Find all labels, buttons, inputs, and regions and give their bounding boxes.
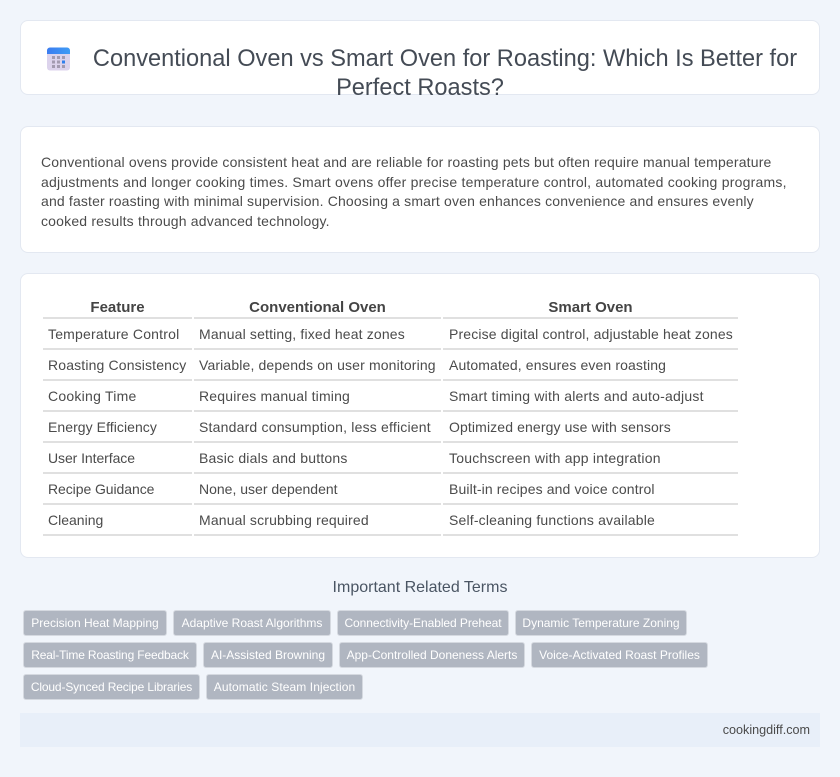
row: recipe guidance: Built-in recipes and voice control (449, 481, 655, 497)
row: recipe guidance: None, user dependent (199, 481, 338, 497)
tag (23, 610, 167, 636)
tag group: related terms (23, 610, 708, 700)
footer source text: cookingdiff.com (723, 723, 810, 737)
tag (206, 674, 363, 700)
row: user interface: User Interface (48, 450, 135, 466)
row: cleaning: Manual scrubbing required (199, 512, 369, 528)
text block: introduction: and faster roasting with minimal supervision. Choosing a smart oven enhances convenience and ensures evenly (41, 193, 754, 209)
row: recipe guidance: Recipe Guidance (48, 481, 154, 497)
tag: Voice-Activated Roast Profiles (539, 648, 700, 662)
row: recipe guidance (48, 481, 655, 497)
tag: AI-Assisted Browning (211, 648, 325, 662)
tag (337, 610, 509, 636)
row: cleaning: Cleaning (48, 512, 103, 528)
tag: Adaptive Roast Algorithms (182, 616, 322, 630)
footer bar (20, 713, 820, 747)
text block: introduction: cooked results through advanced technology. (41, 212, 330, 228)
row: cleaning: Self-cleaning functions available (449, 512, 655, 528)
text block: introduction (41, 154, 787, 229)
row: temperature control: Manual setting, fixed heat zones (199, 326, 405, 342)
row: cooking time: Cooking Time (48, 388, 137, 404)
panel: title card (20, 20, 820, 95)
row: temperature control: Temperature Control (48, 326, 179, 342)
row: energy efficiency: Standard consumption, less efficient (199, 419, 431, 435)
row: temperature control (48, 326, 733, 342)
tag (515, 610, 687, 636)
tag: Real-Time Roasting Feedback (31, 648, 189, 662)
tag (23, 642, 197, 668)
tag: Dynamic Temperature Zoning (522, 616, 680, 630)
table header: smart oven: Smart Oven (548, 299, 633, 316)
row: roasting consistency: Automated, ensures even roasting (449, 357, 666, 373)
row: cleaning (48, 512, 655, 528)
row: energy efficiency: Optimized energy use with sensors (449, 419, 671, 435)
row: energy efficiency (48, 419, 671, 435)
table: oven comparison (43, 299, 738, 536)
row: roasting consistency: Variable, depends on user monitoring (199, 357, 436, 373)
table header: conventional oven: Conventional Oven (249, 299, 386, 316)
row: energy efficiency: Energy Efficiency (48, 419, 157, 435)
tag (339, 642, 525, 668)
title: Perfect Roasts? (336, 75, 504, 101)
title: Conventional Oven vs Smart Oven for Roasting: Which Is Better for (93, 46, 797, 72)
tag: App-Controlled Doneness Alerts (347, 648, 517, 662)
text block: introduction: adjustments and longer cooking times. Smart ovens offer precise temperature control, automated cooking programs, (41, 174, 787, 190)
row: cooking time: Requires manual timing (199, 388, 350, 404)
tag (531, 642, 708, 668)
panel: introduction (20, 126, 820, 253)
row: roasting consistency (48, 357, 666, 373)
row: temperature control: Precise digital control, adjustable heat zones (449, 326, 733, 342)
table header: feature: Feature (90, 299, 145, 316)
tag: Precision Heat Mapping (31, 616, 159, 630)
row: cooking time (48, 388, 704, 404)
title (93, 46, 797, 101)
row: cooking time: Smart timing with alerts and auto-adjust (449, 388, 704, 404)
panel: comparison table (20, 273, 820, 558)
heading: important related terms: Important Related Terms (333, 579, 507, 596)
tag: Automatic Steam Injection (214, 680, 355, 694)
tag: Connectivity-Enabled Preheat (344, 616, 502, 630)
row: user interface (48, 450, 661, 466)
tag (203, 642, 333, 668)
tag (23, 674, 200, 700)
text block: introduction: Conventional ovens provide consistent heat and are reliable for roasting pets but often require manual temperature (41, 154, 772, 170)
icon: calendar app grid (47, 48, 70, 70)
tag (173, 610, 331, 636)
row: user interface: Touchscreen with app integration (449, 450, 661, 466)
row: roasting consistency: Roasting Consistency (48, 357, 186, 373)
tag: Cloud-Synced Recipe Libraries (31, 680, 192, 694)
row: user interface: Basic dials and buttons (199, 450, 348, 466)
